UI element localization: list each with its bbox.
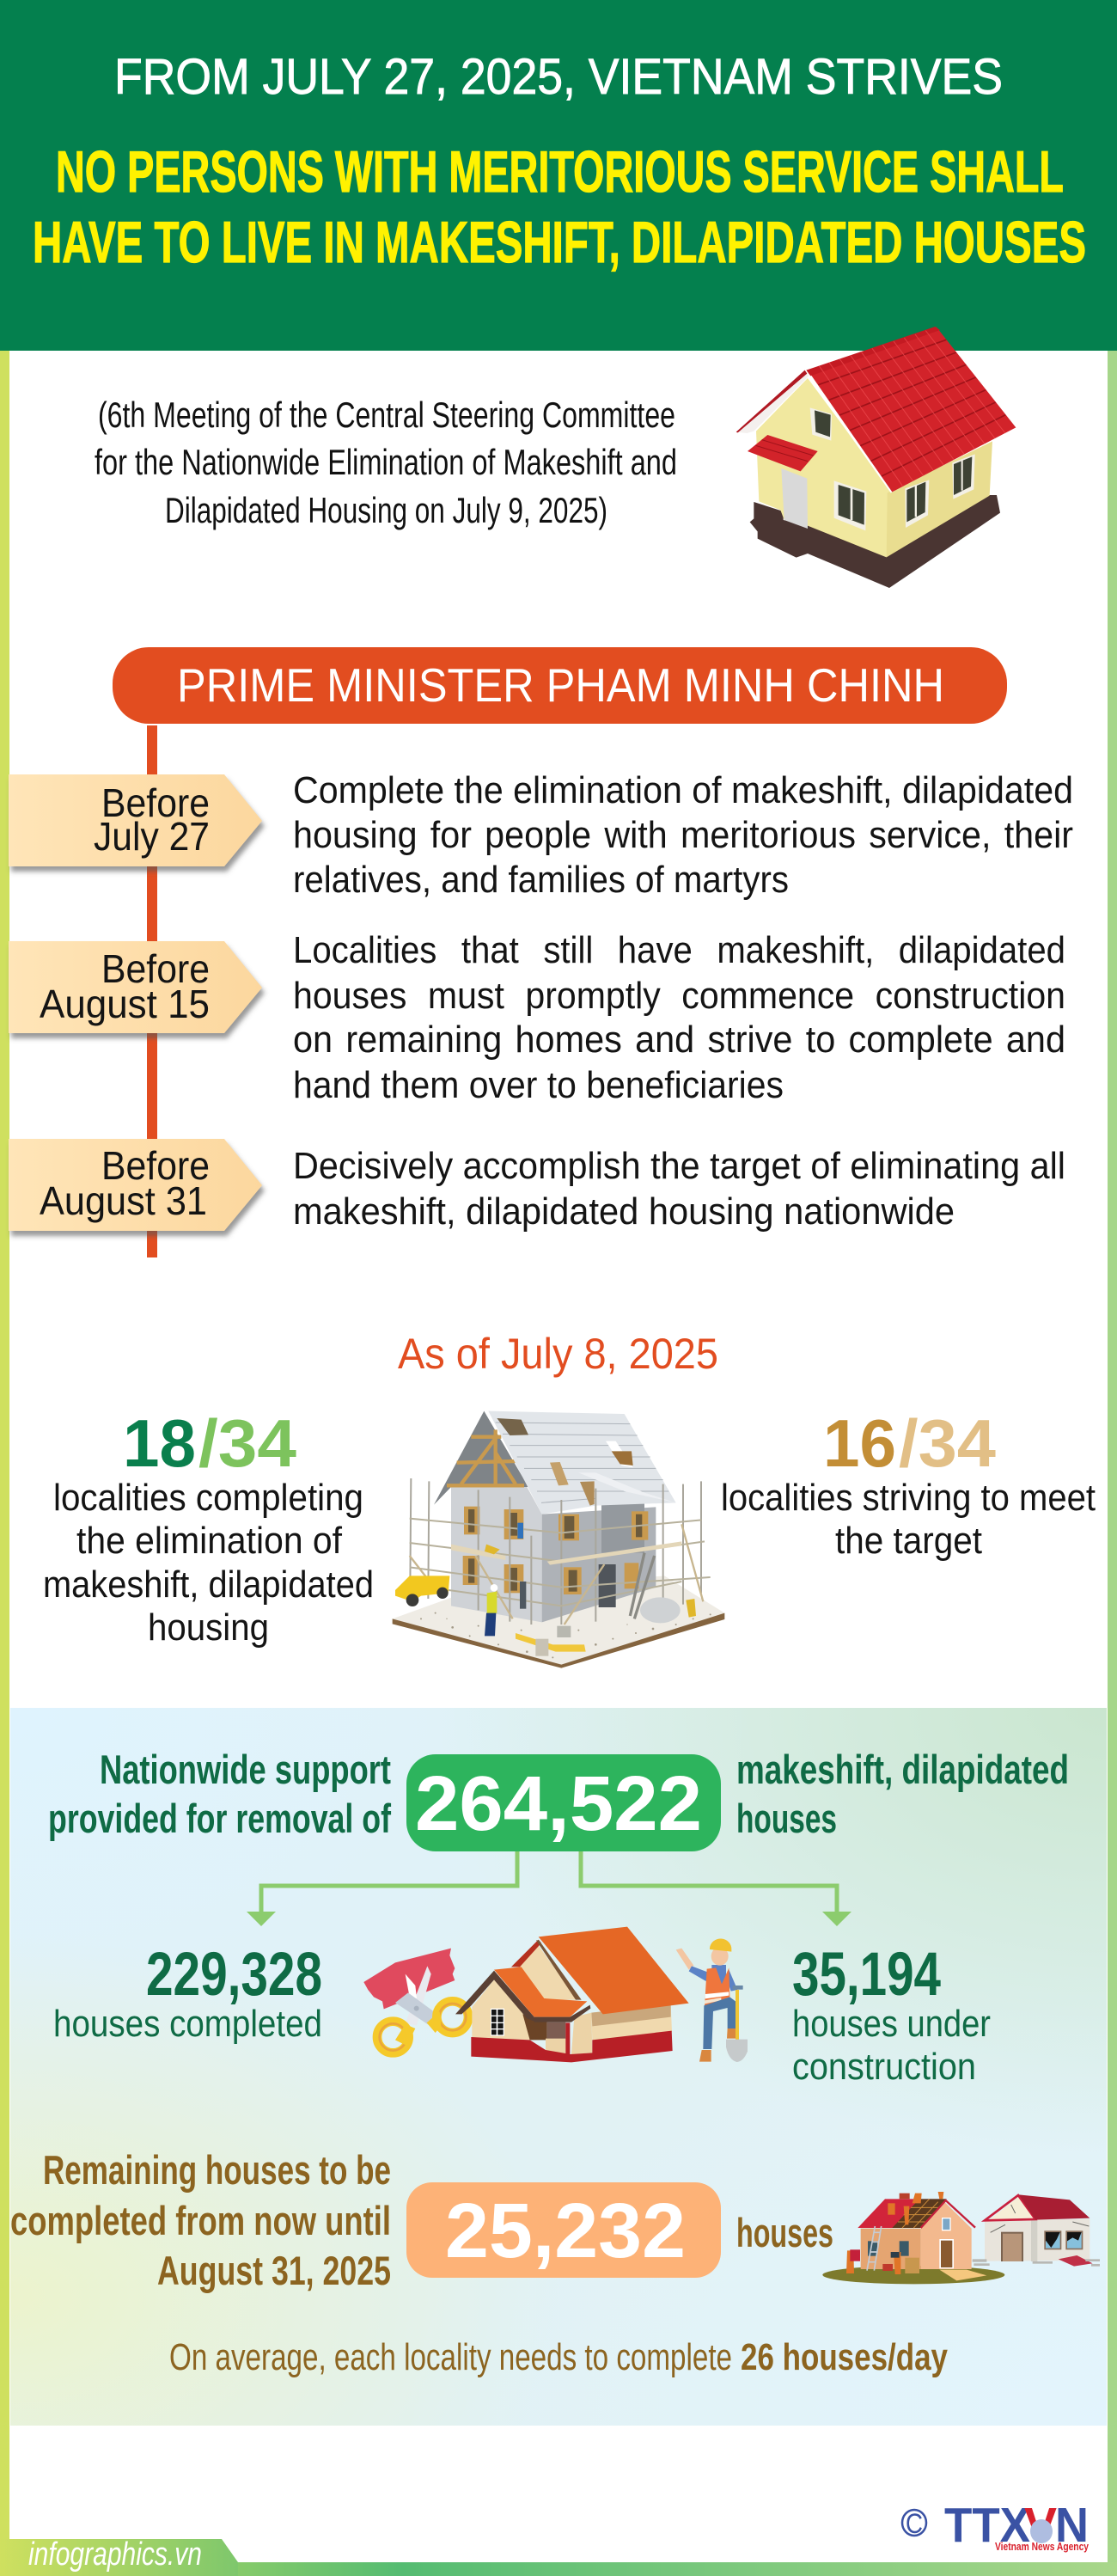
stat: 18 of 34	[43, 1405, 374, 1649]
text: remaining houses: August 31, 2025	[157, 2248, 391, 2293]
date tag: July 27: Before	[101, 780, 210, 825]
text: daily average: On average, each locality needs to complete	[169, 2336, 732, 2378]
logo: TTXVN: TTX	[944, 2498, 1030, 2553]
callout: 264,522: 264,522	[415, 1761, 702, 1847]
callout: 25,232	[406, 2182, 721, 2278]
stat: 16 of 34: 16	[823, 1405, 896, 1481]
text: August 31 task: makeshift, dilapidated housing nationwide	[293, 1190, 955, 1233]
logo: TTXVN: Vietnam News Agency	[995, 2540, 1090, 2553]
text: August 31 task: Decisively accomplish the target of eliminating all	[293, 1145, 1065, 1187]
stat: houses under construction	[792, 1941, 991, 2088]
stat caption: housing	[148, 1606, 269, 1649]
date tag: August 31	[9, 1139, 262, 1231]
text: August 15 task: Localities that still have makeshift, dilapidated	[293, 929, 1065, 971]
text: remaining houses	[10, 2147, 391, 2293]
meeting note: Dilapidated Housing on July 9, 2025)	[165, 490, 607, 530]
header banner	[0, 0, 1117, 351]
text: daily average: 26 houses/day	[741, 2336, 948, 2378]
arrow connector: total to completed	[247, 1851, 517, 1926]
date tag: August 31: Before	[101, 1143, 210, 1188]
stat: 18 of 34: /34	[198, 1405, 296, 1481]
icon: house under construction	[393, 1411, 724, 1668]
text: houses label: houses	[736, 2210, 833, 2255]
callout: 25,232: 25,232	[445, 2188, 686, 2274]
date tag: August 15: Before	[101, 946, 210, 991]
stat caption	[43, 1477, 374, 1649]
icon: construction worker	[676, 1938, 748, 2062]
timeline line	[147, 725, 157, 1257]
footer tab with site name: infographics.vn	[28, 2536, 202, 2573]
stat: houses under construction: houses under	[792, 2003, 991, 2045]
icon: ribbon cutting scissors	[363, 1949, 468, 2053]
stat: houses completed: 229,328	[146, 1941, 322, 2009]
left side bar	[0, 351, 9, 2576]
text: August 15 task: on remaining homes and strive to complete and	[293, 1019, 1065, 1061]
heading: as of date: As of July 8, 2025	[398, 1330, 718, 1378]
text: July 27 task: housing for people with meritorious service, their	[293, 814, 1073, 856]
logo: TTXVN: N	[1055, 2498, 1089, 2553]
footer bar	[0, 2562, 1117, 2576]
text: July 27 task	[293, 769, 1073, 901]
stat: houses completed	[53, 1941, 322, 2045]
arrow connector: total to under construction	[581, 1851, 851, 1926]
stat: houses under construction: construction	[792, 2046, 976, 2088]
text: July 27 task: Complete the elimination of makeshift, dilapidated	[293, 769, 1073, 811]
text: support tail: houses	[736, 1796, 837, 1841]
stat: 16 of 34	[721, 1405, 1096, 1562]
text: remaining houses: completed from now until	[10, 2198, 391, 2243]
stat caption: the target	[835, 1520, 982, 1562]
meeting note	[95, 395, 677, 530]
icon: orange roof house	[455, 1927, 689, 2062]
stat caption	[721, 1477, 1096, 1562]
date tag: July 27	[9, 774, 262, 866]
stat: houses under construction: 35,194	[792, 1941, 941, 2009]
logo: TTXVN	[902, 2498, 1090, 2553]
header line: FROM JULY 27, 2025, VIETNAM STRIVES	[114, 49, 1003, 105]
text: support lead-in: Nationwide support	[100, 1747, 391, 1792]
text: August 31 task	[293, 1145, 1065, 1233]
logo: TTXVN: C	[906, 2508, 923, 2539]
right side bar	[1108, 351, 1117, 2576]
stat caption: localities completing	[53, 1477, 363, 1519]
icon: house being repaired and ruined house	[822, 2192, 1100, 2284]
stat: 16 of 34: /34	[899, 1405, 996, 1481]
headline	[33, 139, 1086, 275]
stat: 18 of 34: 18	[123, 1405, 196, 1481]
meeting note: for the Nationwide Elimination of Makeshift and	[95, 442, 677, 482]
stat: houses completed: houses completed	[53, 2003, 322, 2045]
text: support lead-in	[48, 1747, 391, 1841]
text: support tail	[736, 1747, 1069, 1841]
date tag: August 31: August 31	[40, 1178, 207, 1223]
text: August 15 task: hand them over to beneficiaries	[293, 1064, 784, 1106]
text: August 15 task: houses must promptly commence construction	[293, 975, 1065, 1017]
pill text: PRIME MINISTER PHAM MINH CHINH	[177, 658, 944, 712]
date tag: July 27: July 27	[94, 814, 210, 859]
meeting note: (6th Meeting of the Central Steering Committee	[98, 395, 675, 435]
text: July 27 task: relatives, and families of martyrs	[293, 859, 789, 901]
icon: red roof house	[736, 327, 1016, 588]
text: remaining houses: Remaining houses to be	[43, 2147, 391, 2193]
date tag: August 15	[9, 941, 262, 1033]
leader pill	[113, 647, 1007, 724]
logo: TTXVN: V	[1024, 2498, 1057, 2553]
panel: nationwide figures	[10, 1708, 1107, 2426]
text: August 15 task	[293, 929, 1065, 1106]
stat caption: the elimination of	[76, 1520, 343, 1562]
date tag: August 15: August 15	[40, 982, 210, 1026]
stat caption: makeshift, dilapidated	[43, 1563, 374, 1606]
text: support lead-in: provided for removal of	[48, 1796, 391, 1841]
